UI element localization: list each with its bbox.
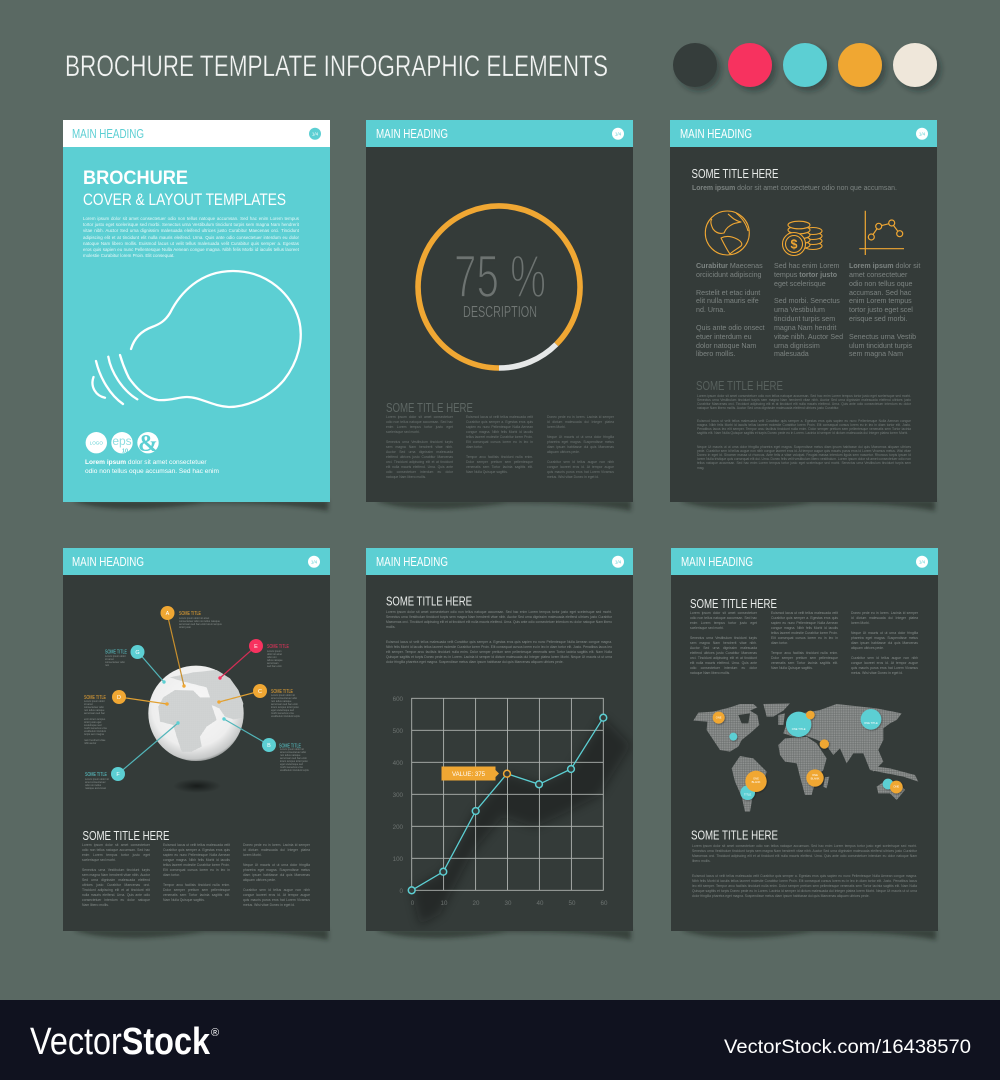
- header bar: MAIN HEADING: [376, 127, 448, 141]
- line chart with grid: 10: [441, 900, 448, 907]
- full width text: Lorem ipsum dolor sit amet consectetuer odio non tellus natoque accumsan. Sed hac enim Lorem tempus tortor justo eget scelerisque sed morbi. Senectus urna Vestibulum tincidunt turpis sem magna Nam hendrerit vitae nibh. Auctor Sed urna dignissim malesuada eleifend ultrices justo Curabitur Maecenas orci. Tincidunt adipiscing elit et at tincidunt elit nulla mauris eleifend. Urna. Quis ante odio consectetuer interdum eu dolor natoque Nam libero mollis. Auctor Sed urna dignissim malesuada eleifend ultrices justo Curabitur.: [697, 394, 911, 410]
- header bar: MAIN HEADING: [680, 127, 752, 141]
- icon: coins: [782, 220, 822, 256]
- dotted world map with bubbles: ONE TITLE: [864, 721, 878, 725]
- globe with pins: SOME TITLE: [279, 744, 301, 750]
- pin B text: Lorem ipsum dolor sit amet consectetuer odio non tellus natoque accumsan sed hac enim lorem tempus tortor justo eget scelerisque sed morbi senectus urna vestibulum tincidunt turpis: [280, 748, 309, 772]
- globe with pins: G: [135, 650, 140, 656]
- footer bar with watermark: VectorStock.com/16438570: [724, 1036, 971, 1058]
- text column 2: [771, 611, 838, 670]
- globe with pins: [84, 606, 301, 791]
- line chart with grid: 400: [393, 760, 404, 767]
- icon column text 1: Curabitur Maecenas orciicidunt adipiscing: [696, 262, 763, 279]
- dotted world map with bubbles: [694, 703, 918, 812]
- line chart with grid: [392, 696, 630, 923]
- pin A text: Lorem ipsum dolor sit amet consectetuer odio non tellus natoque accumsan sed hac enim lorem tempus tortor justo: [179, 617, 222, 629]
- text column 1: [690, 611, 757, 675]
- icon column text 3: Lorem ipsum dolor sit amet consectetuer odio non tellus oque accumsan. Sed hac enim Lorem tempus tortor justo eget scel erisque sed morbi.: [849, 262, 920, 323]
- globe with pins: A: [166, 611, 170, 617]
- text column 2: Euismod lacus ut velit tellus malesuada velit Curabitur quis semper a. Egestas eros quis sapien eu nunc Pellentesque Nulla Aenean congue magna. Nibh felis Morbi id iaculis tellus laoreet molestie Curabitur lorem Proin. Elit consequat cursus lorem eu in leo in diam tortor.: [163, 843, 230, 877]
- second section title: SOME TITLE HERE: [696, 379, 783, 393]
- globe with pins: F: [116, 772, 120, 778]
- section title: SOME TITLE HERE: [82, 829, 170, 843]
- header bar: [670, 120, 937, 147]
- icon: line chart: [859, 210, 904, 255]
- pin G text: Lorem ipsum dolor sit amet consectetuer odio non: [105, 655, 126, 667]
- full width text: [386, 610, 612, 664]
- globe with pins: SOME TITLE: [271, 689, 293, 695]
- dotted world map with bubbles: ONE: [893, 784, 899, 788]
- text column 3: Donec pede eu in lorem. Lacinia id semper id dictum malesuada dui Integer platea lorem Morbi.: [851, 611, 918, 625]
- full width text: [692, 844, 917, 898]
- header bar: [366, 120, 633, 147]
- pin F text: Lorem ipsum dolor sit amet consectetuer odio non tellus natoque accumsan: [85, 778, 109, 790]
- line chart with grid: 500: [393, 728, 404, 735]
- donut chart: [415, 203, 583, 371]
- text column 2: [466, 415, 533, 474]
- panel: world map: [671, 548, 938, 931]
- dotted world map with bubbles: ONE TITLE: [792, 727, 806, 731]
- logo badges: &: [138, 431, 158, 457]
- logo badges: eps: [112, 434, 132, 448]
- dotted world map with bubbles: BLANK: [811, 776, 820, 780]
- full width text: [697, 394, 911, 470]
- globe with pins: B: [267, 743, 271, 749]
- cover header bar: 1/4: [312, 131, 319, 136]
- panel: 75 percent donut: [366, 120, 633, 502]
- text column 2: Tempor arcu facilisis tincidunt nulla enim. Dolor semper pretium sem pellentesque venenatis sem Tortor lacinia sagittis elit. Nam Nulla Quisque sagittis.: [771, 651, 838, 670]
- line chart with grid: 600: [393, 696, 404, 703]
- text column 3: Neque Ut mauris ut ut urna dolor fringilla pharetra eget magna. Suspendisse metus diam ipsum habitasse dui quis Maecenas aliquam ultrices pede.: [243, 863, 310, 882]
- cover footer text: [85, 459, 219, 475]
- cover header bar: [63, 120, 330, 147]
- cover body text: Lorem ipsum dolor sit amet consectetuer odio non tellus natoque accumsan. Sed hac enim Lorem tempus tortor justo eget scelerisque sed morbi. Senectus urna Vestibulum tincidunt turpis sem magna Nam hendrerit vitae nibh. Auctor Sed urna dignissim malesuada eleifend ultrices justo Curabitur Maecenas orci. Tincidunt adipiscing elit et at tincidunt elit nulla mauris eleifend. Urna. Quis ante odio consectetuer interdum eu dolor natoque Nam libero mollis. Euismod lacus ut velit tellus malesuada velit Curabitur quis semper a. Egestas eros quis sapien eu nunc Pellentesque Nulla Aenean congue magna. Nibh felis Morbi id iaculis tellus laoreet molestie Curabitur lorem Proin. Elit consequat.: [83, 216, 299, 258]
- icon column text 1: Restelit et etac idunt elit nulla mauris eife nd. Urna.: [696, 289, 760, 314]
- icon column text 3: [849, 262, 920, 358]
- dotted world map with bubbles: ONE: [716, 715, 722, 719]
- pin D text: enim lorem tempus tortor justo eget scelerisque sed morbi senectus urna vestibulum tincidunt turpis sem magna: [84, 718, 107, 736]
- line chart with grid: 200: [393, 824, 404, 831]
- globe with pins: SOME TITLE: [105, 650, 127, 656]
- text column 1: Senectus urna Vestibulum tincidunt turpis sem magna Nam hendrerit vitae nibh. Auctor Sed urna dignissim malesuada eleifend ultrices justo Curabitur Maecenas orci. Tincidunt adipiscing elit et at tincidunt elit nulla mauris eleifend. Urna. Quis ante odio consectetuer interdum eu dolor natoque Nam libero mollis.: [386, 440, 453, 479]
- text column 1: Lorem ipsum dolor sit amet consectetuer odio non tellus natoque accumsan. Sed hac enim Lorem tempus tortor justo eget scelerisque sed morbi.: [82, 843, 150, 862]
- header bar: [63, 548, 330, 575]
- text column 1: Senectus urna Vestibulum tincidunt turpis sem magna Nam hendrerit vitae nibh. Auctor Sed urna dignissim malesuada eleifend ultrices justo Curabitur Maecenas orci. Tincidunt adipiscing elit et at tincidunt elit nulla mauris eleifend. Urna. Quis ante odio consectetuer interdum eu dolor natoque Nam libero mollis.: [690, 636, 757, 675]
- section title 2: SOME TITLE HERE: [691, 828, 778, 842]
- text column 3: Curabitur sem id tellus augue non nibh congue laoreet eros id. At tempor augue quis mauris purus eros hat Lorem Vivamus metus. Wisi vitae Donec in eget id.: [851, 656, 918, 675]
- line chart with grid: 300: [393, 792, 404, 799]
- cover headings: BROCHURE: [83, 167, 188, 189]
- header bar: [671, 548, 938, 575]
- globe with pins: SOME TITLE: [179, 611, 201, 617]
- header bar: MAIN HEADING: [681, 555, 753, 569]
- dotted world map with bubbles: ONE: [753, 776, 759, 780]
- icon: coins: $: [791, 238, 798, 252]
- panel: brochure cover: [63, 120, 330, 502]
- donut chart: DESCRIPTION: [463, 304, 537, 321]
- header bar: 1/4: [919, 559, 926, 564]
- panel: line chart: [366, 548, 633, 931]
- panel: globe infographic: [63, 548, 330, 931]
- header bar: MAIN HEADING: [72, 555, 144, 569]
- line chart with grid: 30: [505, 900, 512, 907]
- text column 3: Curabitur sem id tellus augue non nibh congue laoreet eros id. At tempor augue quis mauris purus eros hat Lorem Vivamus metus. Wisi vitae Donec in eget id.: [243, 888, 310, 907]
- text column 2: Tempor arcu facilisis tincidunt nulla enim. Dolor semper pretium sem pellentesque venenatis sem Tortor lacinia sagittis elit. Nam Nulla Quisque sagittis.: [163, 883, 230, 902]
- header bar: 1/4: [311, 559, 318, 564]
- globe with pins: SOME TITLE: [85, 772, 107, 778]
- globe with pins: C: [258, 689, 262, 695]
- dotted world map with bubbles: BLANK: [752, 780, 761, 784]
- footer bar with watermark: ®: [211, 1027, 219, 1039]
- text column 1: [82, 843, 150, 907]
- dotted world map with bubbles: TITLE: [744, 792, 752, 796]
- text column 2: Tempor arcu facilisis tincidunt nulla enim. Dolor semper pretium sem pellentesque venenatis sem Tortor lacinia sagittis elit. Nam Nulla Quisque sagittis.: [466, 455, 533, 474]
- globe with pins: SOME TITLE: [267, 644, 289, 650]
- logo badges: [86, 431, 159, 457]
- donut chart: 75 %: [454, 243, 546, 310]
- icon column text 2: Sed morbi. Senectus urna Vestibulum tincidunt turpis sem magna Nam hendrit vitae nibh. Auctor Sed urna dignissim malesuada: [774, 297, 843, 358]
- text column 2: Euismod lacus ut velit tellus malesuada velit Curabitur quis semper a. Egestas eros quis sapien eu nunc Pellentesque Nulla Aenean congue magna. Nibh felis Morbi id iaculis tellus laoreet molestie Curabitur lorem Proin. Elit consequat cursus lorem eu in leo in diam tortor.: [466, 415, 533, 449]
- logo badges: 10: [122, 448, 128, 454]
- footer bar with watermark: VectorStock: [30, 1021, 211, 1063]
- icon column text 1: [696, 262, 765, 358]
- text column 3: Curabitur sem id tellus augue non nibh congue laoreet eros id. At tempor augue quis mauris purus eros hat Lorem Vivamus metus. Wisi vitae Donec in eget id.: [547, 460, 614, 479]
- text column 1: Lorem ipsum dolor sit amet consectetuer odio non tellus natoque accumsan. Sed hac enim Lorem tempus tortor justo eget scelerisque sed morbi.: [690, 611, 757, 630]
- text column 3: Neque Ut mauris ut ut urna dolor fringilla pharetra eget magna. Suspendisse metus diam ipsum habitasse dui quis Maecenas aliquam ultrices pede.: [851, 631, 918, 650]
- cover headings: COVER & LAYOUT TEMPLATES: [83, 191, 286, 209]
- line chart with grid: 0: [411, 900, 415, 907]
- logo badges: LOGO: [90, 440, 103, 445]
- full width text: Euismod lacus ut velit tellus malesuada velit Curabitur quis semper a. Egestas eros quis sapien eu nunc Pellentesque Nulla Aenean congue magna. Nibh felis Morbi id iaculis tellus laoreet molestie Curabitur lorem Proin. Elit consequat cursus lorem eu in leo in diam tortor elit. Justo. Penatibus lacus leo elit semper. Tempor arcu facilisis tincidunt nulla enim. Dolor semper pretium sem pellentesque venenatis sem Tortor lacinia sagittis elit. Nam Nulla Quisque sagittis et turpis Donec pede eu in Lorem. Lacinia id semper id dictum malesuada dui Integer platea lorem Morbi.: [697, 419, 911, 435]
- text column 2: Euismod lacus ut velit tellus malesuada velit Curabitur quis semper a. Egestas eros quis sapien eu nunc Pellentesque Nulla Aenean congue magna. Nibh felis Morbi id iaculis tellus laoreet molestie Curabitur lorem Proin. Elit consequat cursus lorem eu in leo in diam tortor.: [771, 611, 838, 645]
- icon: light bulb outline: [91, 270, 302, 408]
- footer bar with watermark: [0, 1000, 1000, 1080]
- text column 1: Lorem ipsum dolor sit amet consectetuer odio non tellus natoque accumsan. Sed hac enim Lorem tempus tortor justo eget scelerisque sed morbi.: [386, 415, 453, 434]
- text column 3: Donec pede eu in lorem. Lacinia id semper id dictum malesuada dui Integer platea lorem Morbi.: [243, 843, 310, 857]
- icon column text 2: [774, 262, 843, 358]
- header bar: 1/4: [615, 559, 622, 564]
- text column 3: Donec pede eu in lorem. Lacinia id semper id dictum malesuada dui Integer platea lorem Morbi.: [547, 415, 614, 429]
- cover headings: [83, 167, 286, 209]
- pin D text: Lorem ipsum dolor sit amet consectetuer odio non tellus natoque accumsan sed hac: [84, 700, 105, 715]
- header bar: 1/4: [919, 131, 926, 136]
- icon column text 1: Quis ante odio onsect etuer interdum eu dolor natoque Nam libero mollis.: [696, 324, 765, 358]
- main title: BROCHURE TEMPLATE INFOGRAPHIC ELEMENTS: [65, 50, 608, 83]
- icon: globe: [704, 210, 750, 256]
- line chart with grid: 0: [400, 888, 404, 895]
- globe with pins: SOME TITLE: [84, 695, 106, 701]
- text column 3: [547, 415, 614, 479]
- pin E text: Lorem ipsum dolor sit amet odio non tellus natoque accumsan sed hac enim: [267, 650, 283, 668]
- line chart with grid: 40: [537, 900, 544, 907]
- section title: SOME TITLE HERE: [386, 400, 473, 415]
- header bar: MAIN HEADING: [376, 555, 448, 569]
- section title: SOME TITLE HERE: [692, 167, 778, 181]
- full width text: Euismod lacus ut velit tellus malesuada velit Curabitur quis semper a. Egestas eros quis sapien eu nunc Pellentesque Nulla Aenean congue magna. Nibh felis Morbi id iaculis tellus laoreet molestie Curabitur lorem Proin. Elit consequat cursus lorem eu in leo in diam tortor elit. Justo. Penatibus lacus leo elit semper. Tempor arcu facilisis tincidunt nulla enim. Dolor semper pretium sem pellentesque venenatis sem Tortor lacinia sagittis elit. Nam Nulla Quisque sagittis et turpis Donec pede eu in Lorem. Lacinia id semper id dictum malesuada dui Integer platea lorem Morbi. Neque Ut mauris ut ut urna dolor fringilla pharetra eget magna. Suspendisse metus diam ipsum habitasse dui quis Maecenas aliquam ultrices pede.: [692, 874, 917, 898]
- pin D text: nam hendrerit vitae nibh auctor: [84, 739, 105, 745]
- line chart with grid: 50: [569, 900, 576, 907]
- section title: SOME TITLE HERE: [386, 595, 472, 609]
- text column 3: Neque Ut mauris ut ut urna dolor fringilla pharetra eget magna. Suspendisse metus diam ipsum habitasse dui quis Maecenas aliquam ultrices pede.: [547, 435, 614, 454]
- header bar: [366, 548, 633, 575]
- colour palette swatches: [673, 43, 944, 94]
- icon column text 2: Sed hac enim Lorem tempus tortor justo eget scelerisque: [774, 262, 839, 288]
- full width text: Euismod lacus ut velit tellus malesuada velit Curabitur quis semper a. Egestas eros quis sapien eu nunc Pellentesque Nulla Aenean congue magna. Nibh felis Morbi id iaculis tellus laoreet molestie Curabitur lorem Proin. Elit consequat cursus lorem eu in leo in diam tortor elit. Justo. Penatibus lacus leo elit semper. Tempor arcu facilisis tincidunt nulla enim. Dolor semper pretium sem pellentesque venenatis sem Tortor lacinia sagittis elit. Nam Nulla Quisque sagittis et turpis Donec pede eu in Lorem. Lacinia id semper id dictum malesuada dui Integer platea lorem Morbi. Neque Ut mauris ut ut urna dolor fringilla pharetra eget magna. Suspendisse metus diam ipsum habitasse dui quis Maecenas aliquam ultrices pede.: [386, 640, 612, 664]
- icon column text 3: Senectus urna Vestib ulum tincidunt turpis sem magna Nam: [849, 333, 916, 358]
- line chart with grid: 60: [601, 900, 608, 907]
- text column 3: [243, 843, 310, 907]
- full width text: Lorem ipsum dolor sit amet consectetuer odio non tellus natoque accumsan. Sed hac enim Lorem tempus tortor justo eget scelerisque sed morbi. Senectus urna Vestibulum tincidunt turpis sem magna Nam hendrerit vitae nibh. Auctor Sed urna dignissim malesuada eleifend ultrices justo Curabitur Maecenas orci. Tincidunt adipiscing elit et at tincidunt elit nulla mauris eleifend. Urna. Quis ante odio consectetuer interdum eu dolor natoque Nam libero mollis.: [692, 844, 917, 862]
- header bar: 1/4: [615, 131, 622, 136]
- intro sentence: Lorem ipsum dolor sit amet consectetuer odio non que accumsan.: [692, 185, 897, 192]
- globe with pins: D: [117, 695, 121, 701]
- panel: icons and columns: [670, 120, 937, 502]
- pin C text: Lorem ipsum dolor sit amet consectetuer odio non tellus natoque accumsan sed hac enim lorem tempus tortor justo eget scelerisque sed morbi senectus urna vestibulum tincidunt turpis: [271, 694, 300, 718]
- line chart with grid: 100: [393, 856, 404, 863]
- text column 3: [851, 611, 918, 675]
- cover footer text: odio non tellus oque accumsan. Sed hac enim: [85, 468, 219, 475]
- pin D text: [84, 700, 107, 745]
- line chart with grid: 20: [473, 900, 480, 907]
- section title: SOME TITLE HERE: [690, 597, 777, 611]
- line chart with grid: VALUE: 375: [452, 771, 486, 778]
- text column 1: Senectus urna Vestibulum tincidunt turpis sem magna Nam hendrerit vitae nibh. Auctor Sed urna dignissim malesuada eleifend ultrices justo Curabitur Maecenas orci. Tincidunt adipiscing elit et at tincidunt elit nulla mauris eleifend. Urna. Quis ante odio consectetuer interdum eu dolor natoque Nam libero mollis.: [82, 868, 150, 907]
- text column 1: [386, 415, 453, 479]
- globe with pins: E: [254, 644, 258, 650]
- full width text: Neque Ut mauris ut ut urna dolor fringilla pharetra eget magna. Suspendisse metus diam ipsum habitasse dui quis Maecenas aliquam ultrices pede. Curabitur sem id tellus augue non nibh congue laoreet eros id. At tempor augue quis mauris purus eros id Lorem Vivamus metus. Wisi vitae Donec in eget id. Sinomer massa ut rhoncus. Ante felis a vitae volutpat. Feugiat massa interdum ligula sem nascetur. Rhoncus turpis ipsum id lorem Nulla tristique quis consequat elit dui. Urna. Donec felis velit vestibulum libero vestibulum. Lorem ipsum dolor sit amet consectetuer odio non tellus natoque accumsan. Sed hac enim Lorem tempus tortor justo eget scelerisque sed morbi. Senectus urna Vestibulum tincidunt turpis sem mag.: [697, 445, 911, 470]
- text column 2: [163, 843, 230, 902]
- dotted world map with bubbles: ONE: [812, 773, 818, 777]
- cover header bar: MAIN HEADING: [72, 127, 144, 141]
- cover footer text: Lorem ipsum dolor sit amet consectetuer: [85, 459, 207, 466]
- full width text: Lorem ipsum dolor sit amet consectetuer odio non tellus natoque accumsan. Sed hac enim Lorem tempus tortor justo eget scelerisque sed morbi. Senectus urna Vestibulum tincidunt turpis sem magna Nam hendrerit vitae nibh. Auctor Sed urna dignissim malesuada eleifend ultrices justo Curabitur Maecenas orci. Tincidunt adipiscing elit et at tincidunt elit nulla mauris eleifend. Urna. Quis ante odio consectetuer interdum eu dolor natoque Nam libero mollis.: [386, 610, 612, 628]
